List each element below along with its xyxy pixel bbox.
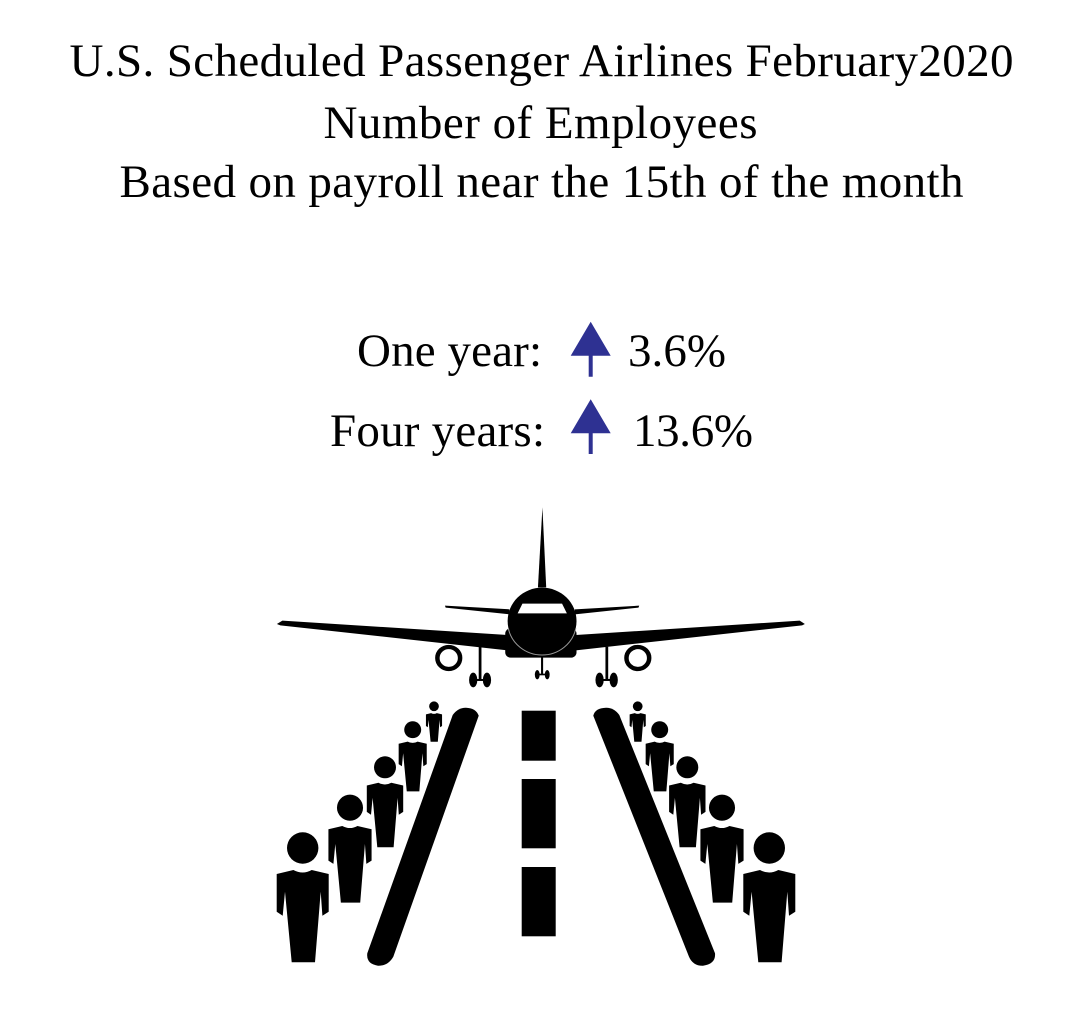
icon: up arrow one year bbox=[571, 322, 611, 377]
runway right edge bbox=[593, 708, 715, 966]
title: Number of Employees bbox=[324, 97, 758, 149]
runway left edge bbox=[367, 708, 479, 966]
stat: one year change bbox=[357, 322, 726, 377]
stat: four years change: Four years: bbox=[330, 405, 545, 457]
stat: one year change: 3.6% bbox=[628, 325, 726, 377]
stat: four years change bbox=[330, 399, 753, 457]
icon: airplane front view bbox=[277, 507, 805, 687]
icon: up arrow four years bbox=[571, 399, 611, 454]
title: U.S. Scheduled Passenger Airlines February2020 bbox=[70, 35, 1014, 87]
stat: four years change: 13.6% bbox=[633, 405, 753, 457]
people: left row bbox=[277, 701, 442, 962]
title bbox=[70, 35, 1014, 208]
runway center dashes bbox=[522, 711, 556, 936]
people: right row bbox=[630, 701, 795, 962]
title: Based on payroll near the 15th of the month bbox=[120, 156, 964, 208]
runway bbox=[367, 708, 715, 966]
stat: one year change: One year: bbox=[357, 325, 542, 377]
